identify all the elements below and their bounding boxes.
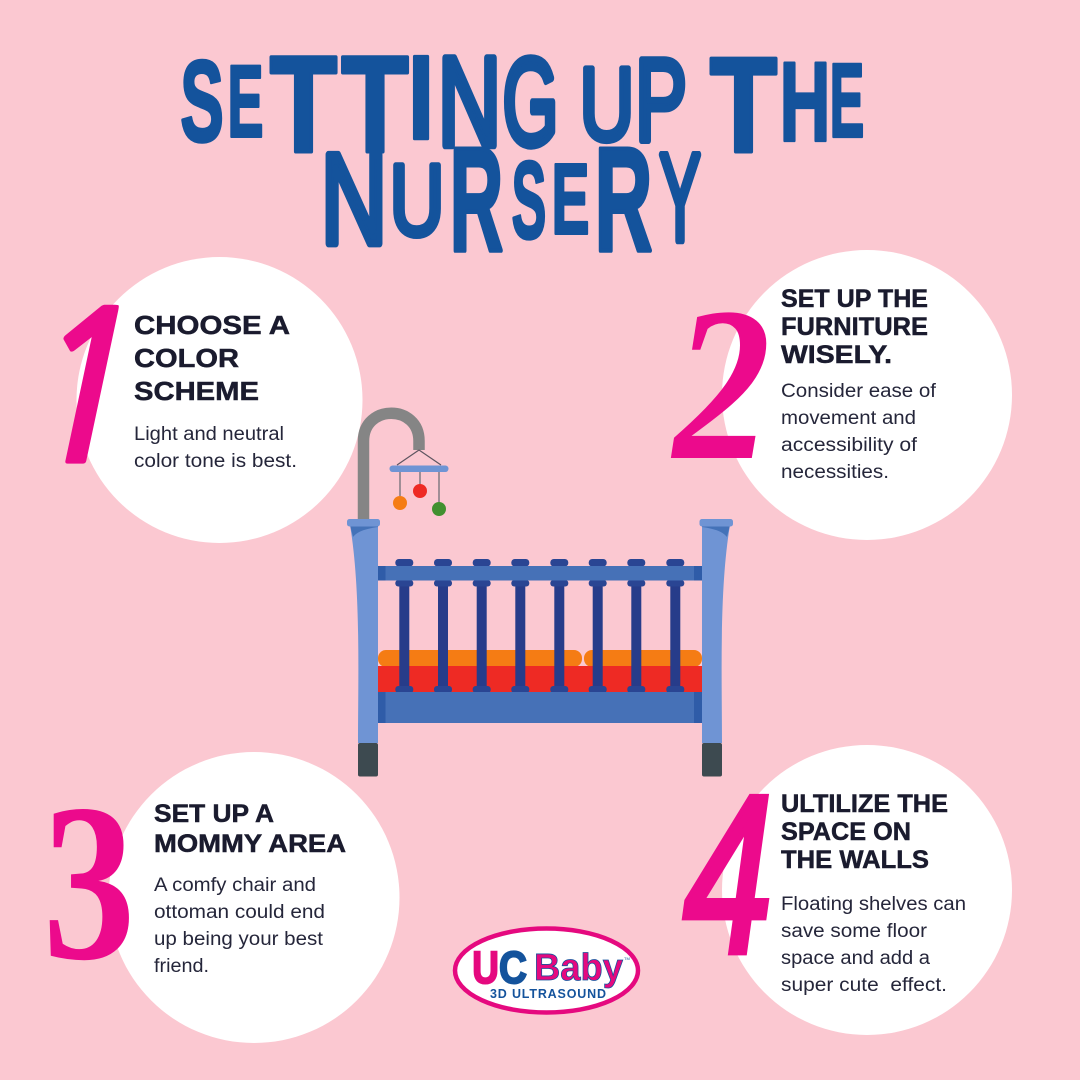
body text: step 2: [781, 381, 937, 483]
illustration: crib with mobile: [347, 413, 733, 776]
title: S: [180, 36, 224, 166]
logo tagline: 3D ULTRASOUND: [490, 987, 606, 1001]
heading: choose a color scheme: [134, 310, 290, 406]
body text: step 1: [134, 424, 297, 472]
logo letters UC: C: [499, 942, 527, 993]
mattress: [378, 650, 702, 693]
mobile arm: [364, 413, 419, 520]
logo letters UC: U: [472, 943, 499, 993]
body text: step 1: Light and neutral: [134, 424, 284, 445]
heading: set up the furniture wisely: FURNITURE: [781, 313, 928, 341]
heading: set up the furniture wisely: [781, 285, 928, 369]
body text: step 1: color tone is best.: [134, 451, 297, 472]
heading: set up the furniture wisely: WISELY.: [781, 341, 892, 369]
title: S: [512, 140, 546, 262]
body text: step 2: necessities.: [781, 462, 889, 483]
heading: utilize the space on the walls: THE WALLS: [781, 846, 929, 874]
title: R: [450, 116, 503, 282]
hanging mobile: [390, 450, 448, 516]
heading: choose a color scheme: SCHEME: [134, 376, 259, 406]
title: N: [321, 127, 387, 271]
title: T: [270, 29, 337, 181]
body text: step 3: A comfy chair and: [154, 875, 316, 896]
slats: [399, 583, 680, 688]
title: Y: [659, 128, 701, 267]
number 3: 3: [43, 757, 135, 1007]
panel: step 4 utilize the space on the walls: [684, 745, 1012, 1035]
body text: step 4: [781, 894, 966, 996]
logo: UC Baby 3D Ultrasound: [455, 928, 638, 1012]
heading: utilize the space on the walls: ULTILIZE THE: [781, 790, 948, 818]
panel: step 2 set up the furniture wisely: [670, 250, 1012, 540]
number 2: 2: [670, 262, 771, 506]
title: I: [408, 30, 434, 164]
logo letters UC: [472, 942, 527, 993]
title: H: [780, 39, 830, 164]
body text: step 4: Floating shelves can: [781, 894, 966, 915]
left post: [347, 519, 380, 776]
body text: step 3: up being your best: [154, 929, 324, 950]
body text: step 4: space and add a: [781, 948, 930, 969]
title: G: [502, 34, 559, 172]
body text: step 3: ottoman could end: [154, 902, 325, 923]
title: T: [341, 29, 409, 181]
body text: step 4: save some floor: [781, 921, 928, 942]
right post: [700, 519, 733, 776]
heading: utilize the space on the walls: [781, 790, 948, 874]
body text: step 2: accessibility of: [781, 435, 918, 456]
body text: step 2: movement and: [781, 408, 916, 429]
body text: step 2: Consider ease of: [781, 381, 937, 402]
heading: utilize the space on the walls: SPACE ON: [781, 818, 911, 846]
body text: step 3: friend.: [154, 956, 209, 977]
logo trademark: TM: [624, 956, 630, 961]
title: N: [438, 32, 501, 173]
title: U: [580, 48, 634, 163]
title: [180, 29, 864, 283]
title: E: [227, 45, 264, 159]
body text: step 3: [154, 875, 325, 977]
logo word Baby: Baby: [534, 947, 623, 989]
number 4: 4: [684, 749, 772, 1000]
title: P: [635, 36, 687, 166]
heading: choose a color scheme: COLOR: [134, 343, 239, 373]
title: E: [830, 41, 864, 159]
heading: set up a mommy area: SET UP A: [154, 800, 274, 828]
heading: set up a mommy area: [154, 800, 346, 858]
title: T: [710, 31, 777, 181]
panel: step 3 set up a mommy area: [43, 752, 400, 1043]
rails: [378, 566, 702, 723]
title: U: [390, 143, 444, 256]
number 1: 1: [5, 288, 167, 495]
body text: step 4: super cute effect.: [781, 975, 947, 996]
title: R: [595, 117, 652, 283]
title: E: [551, 144, 590, 256]
panel: step 1 choose a color scheme: [5, 257, 362, 543]
heading: choose a color scheme: CHOOSE A: [134, 310, 290, 340]
heading: set up a mommy area: MOMMY AREA: [154, 830, 346, 858]
heading: set up the furniture wisely: SET UP THE: [781, 285, 928, 313]
